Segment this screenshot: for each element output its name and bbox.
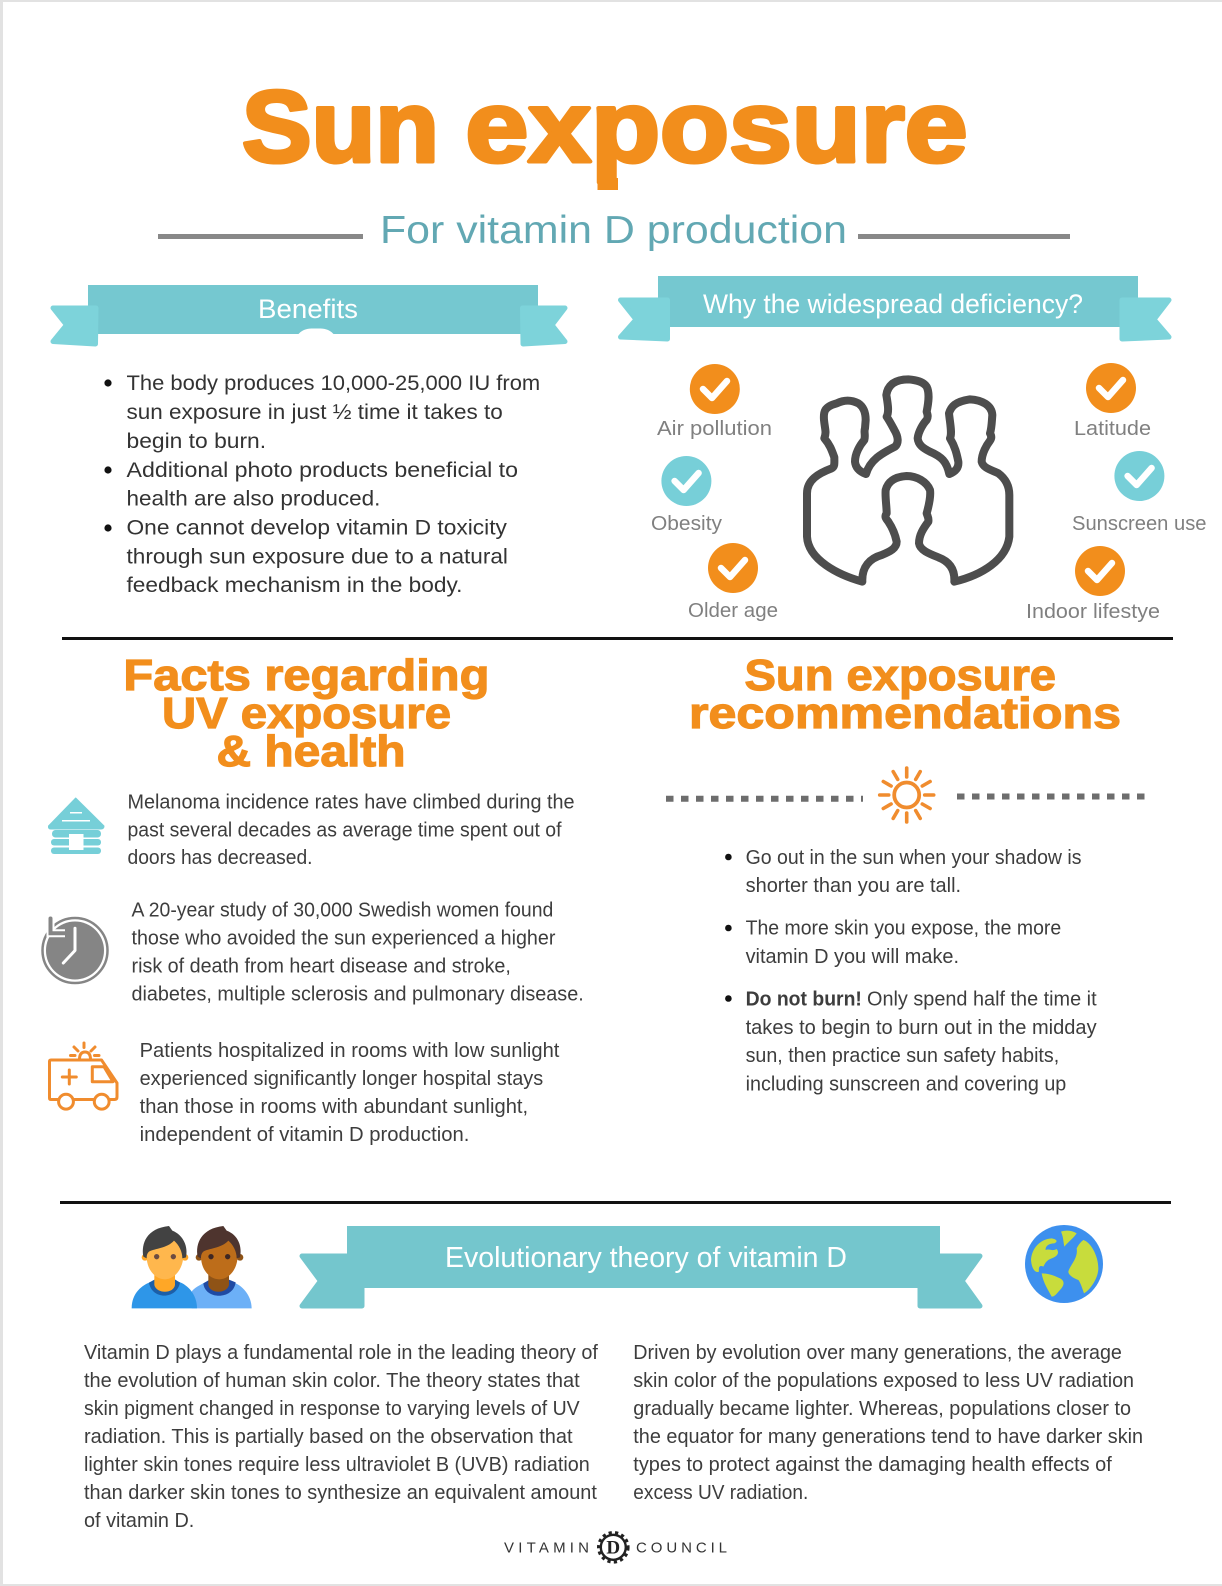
fact: hospital stays: than those in rooms with abundant sunlight,: [140, 1095, 528, 1118]
fact: hospital stays: Patients hospitalized in rooms with low sunlight: [140, 1039, 560, 1062]
fact: hospital stays: experienced significantly longer hospital stays: [140, 1067, 543, 1090]
text: right column: gradually became lighter. Whereas, populations closer to: [633, 1397, 1131, 1420]
item: indoor lifestyle: Indoor lifestye: [1026, 600, 1160, 623]
item: obesity: Obesity: [651, 512, 723, 535]
fact: melanoma: Melanoma incidence rates have climbed during the: [128, 790, 574, 814]
panel: facts regarding UV exposure: [42, 651, 584, 1146]
subtitle with rules: [158, 209, 1070, 252]
text: left column: Vitamin D plays a fundamental role in the leading theory of: [84, 1341, 598, 1364]
item: air pollution: Air pollution: [657, 417, 772, 440]
subtitle with rules: For vitamin D production: [380, 209, 847, 252]
text: right column: [633, 1341, 1143, 1504]
recommendations list: Only spend half the time it: [867, 988, 1097, 1010]
item: air pollution: [657, 364, 772, 440]
icon: cabin: [48, 798, 104, 854]
divider with sun icon: [666, 768, 1146, 822]
recommendations list: The more skin you expose, the more: [746, 917, 1061, 940]
title: Sun: [242, 72, 439, 184]
fact: Swedish study: [132, 898, 584, 1006]
fact: hospital stays: independent of vitamin D production.: [140, 1123, 469, 1146]
recommendations list: Do not burn!: [746, 988, 862, 1010]
recommendations list: shorter than you are tall.: [746, 874, 961, 897]
icon: two people with different skin tones: [132, 1226, 252, 1308]
text: right column: excess UV radiation.: [633, 1481, 808, 1504]
panel: sun exposure recommendations: [666, 651, 1146, 1096]
item: older age: Older age: [688, 599, 778, 622]
fact: Swedish study: those who avoided the sun experienced a higher: [132, 926, 556, 950]
logo: Vitamin D Council: COUNCIL: [636, 1540, 727, 1557]
item: obesity: [651, 456, 723, 535]
heading: facts: Facts regarding: [123, 651, 489, 700]
text: right column: types to protect against the damaging health effects of: [633, 1453, 1112, 1476]
recommendations list: takes to begin to burn out in the midday: [746, 1016, 1097, 1039]
benefits list: through sun exposure due to a natural: [126, 544, 508, 568]
fact: Swedish study: diabetes, multiple sclerosis and pulmonary disease.: [132, 982, 584, 1006]
title: [242, 72, 968, 190]
text: left column: radiation. This is partially based on the observation that: [84, 1425, 573, 1448]
recommendations list: sun, then practice sun safety habits,: [746, 1044, 1059, 1067]
fact: melanoma: [128, 790, 574, 869]
ribbon: benefits: Benefits: [258, 294, 358, 324]
text: left column: of vitamin D.: [84, 1509, 194, 1532]
benefits list: feedback mechanism in the body.: [126, 573, 462, 597]
benefits list: Additional photo products beneficial to: [126, 458, 518, 482]
recommendations list: Go out in the sun when your shadow is: [746, 846, 1082, 869]
ribbon: benefits: [53, 285, 565, 344]
fact: melanoma: past several decades as average time spent out of: [128, 818, 562, 842]
logo: Vitamin D Council: VITAMIN: [504, 1540, 589, 1557]
text: left column: [84, 1341, 598, 1532]
icon: globe: [1025, 1225, 1103, 1303]
heading: facts: UV exposure: [162, 689, 451, 738]
panel: benefits: [53, 285, 565, 597]
icon: ambulance: [50, 1043, 117, 1109]
benefits list: health are also produced.: [126, 486, 380, 510]
benefits list: [104, 371, 540, 597]
text: left column: than darker skin tones to synthesize an equivalent amount: [84, 1481, 597, 1504]
recommendations list: including sunscreen and covering up: [746, 1072, 1066, 1096]
logo: Vitamin D Council: D: [606, 1538, 620, 1558]
text: right column: Driven by evolution over many generations, the average: [633, 1341, 1122, 1364]
ribbon: deficiency: Why the widespread deficiency?: [703, 289, 1083, 319]
fact: hospital stays: [140, 1039, 560, 1146]
heading: facts: & health: [216, 727, 406, 776]
heading: recommendations: Sun exposure: [744, 651, 1056, 700]
heading: facts: [123, 651, 489, 776]
item: older age: [688, 543, 778, 622]
icon: group of people: [807, 379, 1009, 582]
benefits list: sun exposure in just ½ time it takes to: [126, 400, 503, 424]
ribbon: evolutionary theory: Evolutionary theory of vitamin D: [445, 1242, 847, 1274]
logo: Vitamin D Council: [504, 1533, 727, 1562]
benefits list: begin to burn.: [126, 429, 266, 453]
recommendations list: vitamin D you will make.: [746, 945, 959, 968]
benefits list: One cannot develop vitamin D toxicity: [126, 516, 507, 540]
recommendations list: [725, 846, 1097, 1096]
benefits list: The body produces 10,000-25,000 IU from: [126, 371, 540, 395]
ribbon: evolutionary theory: [302, 1226, 980, 1306]
panel: why the widespread deficiency: [620, 276, 1206, 623]
text: left column: the evolution of human skin color. The theory states that: [84, 1369, 580, 1392]
fact: Swedish study: A 20-year study of 30,000 Swedish women found: [132, 898, 553, 922]
item: indoor lifestyle: [1026, 546, 1160, 623]
icon: clock: [42, 918, 108, 983]
text: right column: the equator for many generations tend to have darker skin: [633, 1425, 1143, 1448]
item: latitude: [1074, 363, 1151, 440]
fact: Swedish study: risk of death from heart disease and stroke,: [132, 954, 511, 978]
heading: recommendations: [689, 651, 1121, 738]
text: left column: skin pigment changed in response to varying levels of UV: [84, 1397, 580, 1420]
ribbon: deficiency: [620, 276, 1169, 339]
text: left column: lighter skin tones require less ultraviolet B (UVB) radiation: [84, 1453, 590, 1476]
panel: evolutionary theory: [84, 1225, 1143, 1532]
text: right column: skin color of the populations exposed to less UV radiation: [633, 1369, 1134, 1392]
title: exposure: [466, 72, 968, 184]
fact: melanoma: doors has decreased.: [128, 846, 312, 869]
item: sunscreen use: Sunscreen use: [1072, 512, 1206, 535]
heading: recommendations: recommendations: [689, 689, 1121, 738]
item: sunscreen use: [1072, 451, 1206, 535]
item: latitude: Latitude: [1074, 417, 1151, 440]
